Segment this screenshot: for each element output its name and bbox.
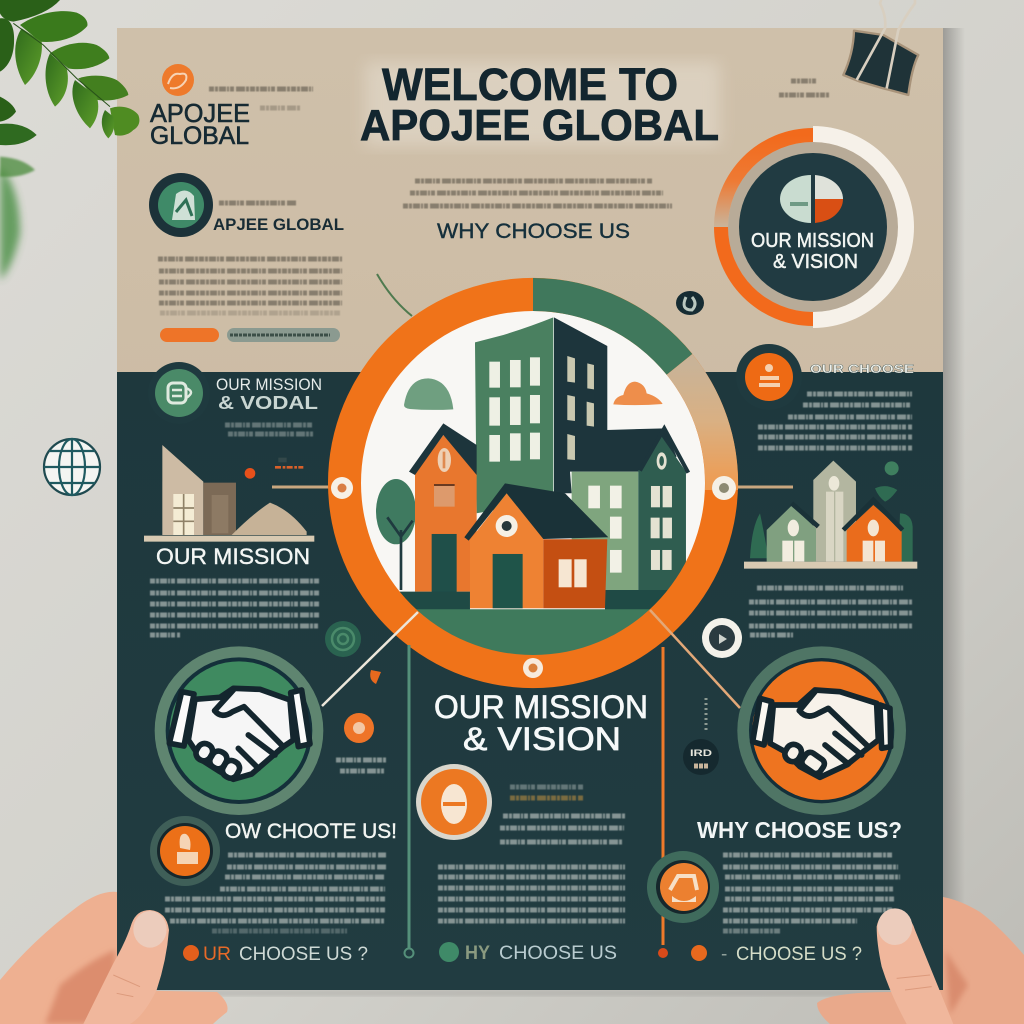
medallion label: OUR MISSION (751, 230, 874, 252)
small badge with caption: left middle (336, 670, 386, 771)
logo wordmark: GLOBAL (150, 122, 249, 150)
section sublines (225, 425, 313, 434)
section text lower (749, 588, 912, 635)
footer left (183, 944, 368, 965)
body text (158, 259, 342, 313)
ring nodes (331, 476, 736, 678)
side connector lines (272, 486, 793, 488)
footer left: CHOOSE US ? (239, 944, 368, 965)
section title: OUR MISSION (156, 544, 310, 569)
medallion icon (780, 175, 843, 223)
intro block: Apojee Global (149, 173, 344, 342)
why choose us heading with intro lines (403, 181, 672, 243)
poster sheet (117, 28, 943, 990)
icon badge (647, 851, 719, 923)
section badge (736, 344, 802, 410)
center heading: our mission and vision: OUR MISSION (434, 689, 648, 725)
orange left house (409, 423, 477, 592)
vertical timeline lines (404, 645, 668, 958)
icon badge (150, 816, 220, 886)
central house medallion (272, 278, 793, 708)
footer center: HY (465, 943, 490, 964)
footer left: UR (203, 944, 231, 965)
logo wordmark (150, 98, 250, 150)
clouds (404, 378, 663, 410)
section heading: & VODAL (218, 393, 318, 413)
ring (328, 278, 738, 688)
logo caption lines (209, 89, 313, 108)
sub heading (510, 787, 583, 798)
title: APOJEE GLOBAL (360, 101, 719, 150)
icon badge (416, 764, 492, 840)
column: left lower (150, 816, 397, 931)
left thumb (83, 910, 169, 1024)
swirl icon (325, 621, 361, 657)
why choose us heading with intro lines: WHY CHOOSE US (437, 220, 630, 243)
right section: our choose (702, 344, 917, 658)
globe icon (44, 439, 100, 495)
tall tower (475, 317, 677, 513)
diagonal connector lines (322, 610, 740, 708)
left section: our mission (144, 362, 361, 657)
badge caption (219, 200, 297, 206)
binder clip (843, 0, 918, 95)
footer right: CHOOSE US ? (736, 944, 862, 965)
column: right lower (647, 817, 902, 931)
footer labels (183, 942, 862, 965)
right thumb (877, 908, 953, 1024)
white disc (357, 307, 709, 659)
plant leaves (0, 0, 139, 280)
white ring icon (702, 618, 742, 658)
footer center: CHOOSE US (499, 943, 617, 964)
logo wordmark: APOJEE (150, 98, 250, 128)
logo: Apojee Global (150, 64, 313, 150)
center heading: our mission and vision: & VISION (463, 721, 621, 757)
footer right: - (721, 944, 727, 965)
heading: OW CHOOTE US! (225, 820, 397, 843)
section heading: OUR CHOOSE (810, 362, 914, 376)
orange front house (464, 483, 608, 608)
connector houses illustration (744, 461, 917, 569)
logo mark (162, 64, 194, 96)
section heading (216, 375, 322, 413)
small badge with caption: right middle: IRD (690, 748, 713, 758)
handshake: left (155, 646, 323, 815)
column: center lower (416, 764, 625, 921)
house illustration (144, 445, 314, 542)
buildings illustration (376, 317, 688, 660)
medallion label: & VISION (773, 251, 858, 273)
section text upper (758, 394, 912, 448)
heading: WHY CHOOSE US? (697, 817, 902, 843)
handshake: right (737, 646, 906, 815)
medallion label (751, 230, 874, 273)
section badge (148, 362, 210, 424)
section heading: OUR MISSION (216, 375, 322, 394)
tree (376, 479, 416, 590)
ground (400, 590, 668, 655)
top-right caption (779, 81, 830, 95)
badge heading: APJEE GLOBAL (213, 215, 344, 234)
badge icon (149, 173, 213, 237)
section text (150, 581, 320, 635)
hands behind poster (0, 892, 1024, 1024)
center heading: our mission and vision (434, 689, 648, 757)
text (438, 816, 625, 921)
title: WELCOME TO (382, 59, 678, 110)
title (360, 59, 720, 150)
text (723, 855, 900, 931)
footer center (439, 942, 617, 964)
pills (160, 328, 340, 342)
small swirl marker (676, 291, 704, 315)
mission and vision medallion (714, 126, 914, 328)
small badge with caption: right middle (683, 698, 719, 775)
thin leaf stem (377, 274, 412, 316)
text (165, 855, 386, 931)
right buildings (572, 428, 688, 591)
